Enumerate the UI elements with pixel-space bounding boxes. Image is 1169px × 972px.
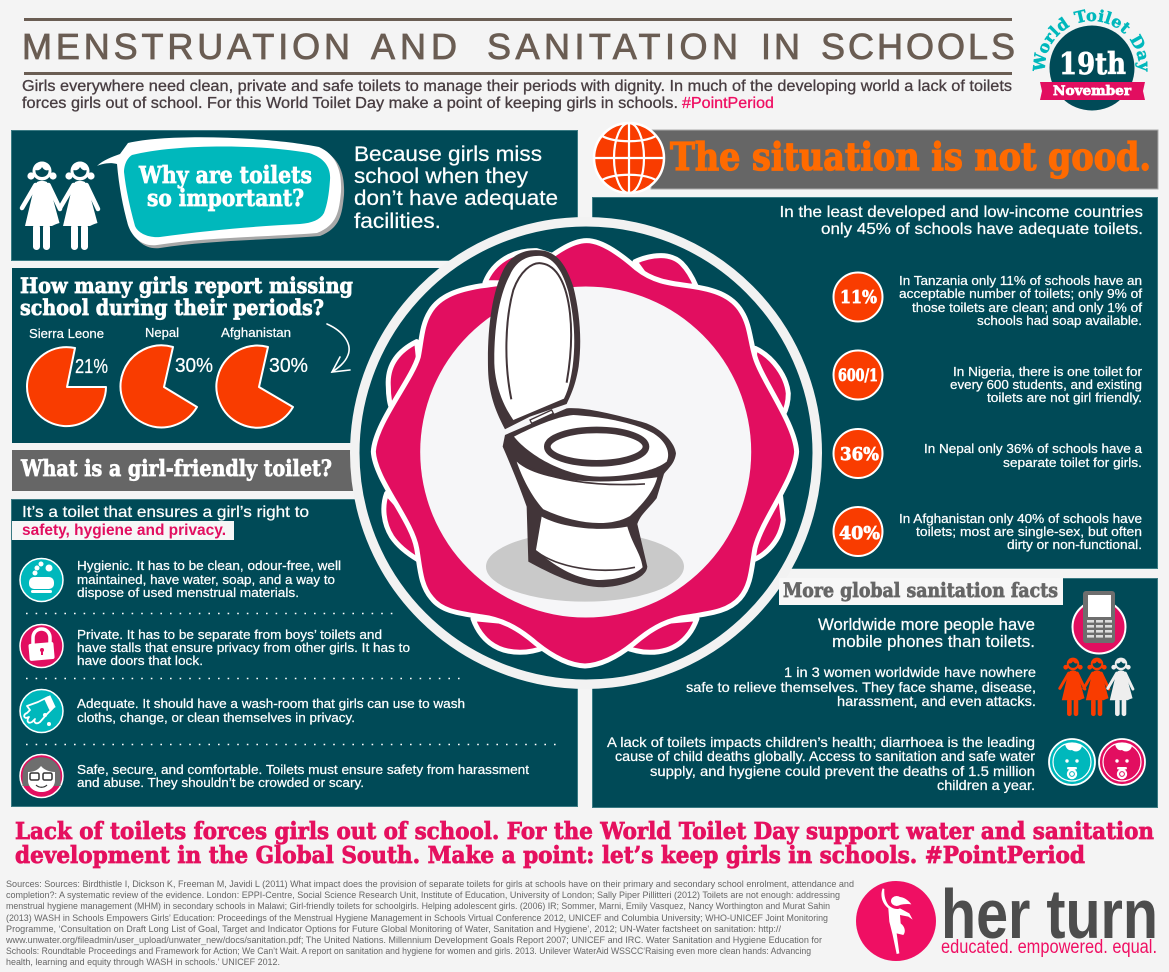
text: children's health: supply, and hygiene could prevent the deaths of 1.5 million — [650, 763, 1035, 779]
intro text: forces girls out of school. For this World Toilet Day make a point of keeping girls in schools. — [22, 95, 678, 112]
pie chart: Sierra Leone — [27, 326, 108, 426]
toilet illustration — [486, 250, 684, 602]
badge: World Toilet Day 19th November — [1032, 9, 1148, 110]
stat: Nigeria 600/1: 600/1 — [838, 366, 878, 386]
text: hygienic: Hygienic. It has to be clean, odour-free, well — [77, 558, 341, 573]
speech bubble: why are toilets so important — [97, 137, 344, 248]
stat: Afghanistan 40%: dirty or non-functional. — [1007, 538, 1142, 552]
text: children's health: cause of child deaths globally. Access to sanitation and safe water — [615, 748, 1035, 764]
text: 1 in 3 women: safe to relieve themselves. They face shame, disease, — [686, 679, 1036, 695]
stat: Tanzania 11% — [834, 272, 1143, 328]
stat: Afghanistan 40%: In Afghanistan only 40% of schools have — [899, 512, 1142, 526]
text: least developed countries: In the least developed and low-income countries — [780, 204, 1143, 221]
icon: mobile phone — [1072, 591, 1126, 654]
stat: Nigeria 600/1: every 600 students, and existing — [950, 378, 1142, 392]
text: children's health — [607, 734, 1035, 793]
text: because girls miss school — [354, 142, 558, 233]
stat: Nigeria 600/1 — [834, 350, 1142, 405]
text: definition of girl-friendly toilet — [12, 504, 309, 540]
title — [22, 18, 1015, 75]
panel: what is a girl-friendly toilet heading: What is a girl-friendly toilet? — [20, 456, 332, 482]
text: safe: and abuse. They shouldn’t be crowded or scary. — [77, 775, 364, 790]
text: mobile phones: Worldwide more people have — [818, 615, 1035, 634]
logo: her turn — [856, 875, 1158, 961]
panel: the situation heading bar — [651, 130, 1158, 189]
heading: more global sanitation facts: More global sanitation facts — [783, 579, 1058, 602]
sources: menstrual hygiene management (MHM) in secondary schools in Malawi; Girl-friendly toilets for schoolgirls. Helping adolescent girls. (2006) IR; Sommer, Marni, Emily Vasquez, Nancy Worthington and Murat Sahin — [6, 901, 830, 912]
stat: Afghanistan 40%: 40% — [839, 523, 880, 544]
text: definition of girl-friendly toilet: safety, hygiene and privacy. — [22, 522, 226, 539]
call to action — [15, 818, 1154, 869]
pie chart: Sierra Leone: Sierra Leone — [29, 326, 104, 341]
sources: Programme, ‘Consultation on Draft Long List of Goal, Target and Indicator Options for Future Global Monitoring of Water, Sanitation and Hygiene’, 2012; UN-Water factsheet on sanitation: http:// — [6, 924, 781, 935]
sources: Sources: Sources: Birdthistle I, Dickson K, Freeman M, Javidi L (2011) What impact does the provision of separate toilets for girls at schools have on their primary and secondary school enrolment, attendance and — [6, 879, 854, 890]
icon: globe — [594, 123, 664, 193]
pie chart: Afghanistan: Afghanistan — [221, 325, 291, 340]
flower badge — [373, 241, 797, 666]
text: adequate: Adequate. It should have a wash-room that girls can use to wash — [77, 696, 465, 711]
panel: more global facts — [592, 578, 1158, 808]
sources: (2013) WASH in Schools Empowers Girls’ Education: Proceedings of the Menstrual Hygiene Management in Schools Virtual Conference 2012, UNICEF and Columbia University; WHO-UNICEF Joint Monitoring — [6, 913, 828, 924]
text: mobile phones — [818, 615, 1035, 651]
stat: Nigeria 600/1: toilets are not girl friendly. — [987, 391, 1142, 405]
icon: two girls holding hands — [22, 162, 98, 250]
text: 1 in 3 women: 1 in 3 women worldwide have nowhere — [784, 664, 1036, 680]
icon: washing hand — [20, 690, 63, 732]
text: least developed countries: only 45% of schools have adequate toilets. — [821, 221, 1143, 238]
text: children's health: A lack of toilets impacts children’s health; diarrhoea is the leading — [607, 734, 1035, 750]
stat: Tanzania 11%: those toilets are clean; and only 1% of — [912, 301, 1143, 315]
text: because girls miss school: don’t have adequate — [354, 186, 558, 210]
icon: padlock — [20, 624, 63, 668]
sources: www.unwater.org/fileadmin/user_upload/unwater_new/docs/sanitation.pdf; The United Nations. Millennium Development Goals Report 2007; UNICEF and IRC. Water Sanitation and Hygiene Education for — [5, 935, 822, 946]
text: least developed countries — [780, 204, 1143, 238]
text: 1 in 3 women — [686, 664, 1036, 709]
arrow: curved hand drawn — [327, 324, 350, 372]
text: hygienic: maintained, have water, soap, and a way to — [77, 572, 335, 587]
sources: completion?: A systematic review of the evidence. London: EPPI-Centre, Social Science Research Unit, Institute of Education, University of London; Sally Piper Pillitteri (2012) Toilets are not enough: addressing — [6, 890, 840, 901]
badge: World Toilet Day 19th November: November — [1053, 84, 1131, 99]
icon: baby teal — [1049, 739, 1095, 785]
pie chart: Nepal: 30% — [175, 355, 213, 377]
stat: Tanzania 11%: acceptable number of toilets; only 9% of — [899, 287, 1143, 301]
stat: Afghanistan 40%: toilets; most are single-sex, but often — [916, 525, 1142, 539]
title: SANITATION — [487, 26, 738, 67]
title: MENSTRUATION — [22, 26, 350, 67]
pie chart: Sierra Leone: 21% — [75, 356, 108, 378]
pie chart: Afghanistan: 30% — [269, 355, 308, 377]
stat: Nepal 36%: separate toilet for girls. — [1003, 456, 1142, 470]
badge: World Toilet Day 19th November: 19th — [1059, 47, 1126, 82]
heading: how many girls report missing school — [20, 273, 353, 320]
text: because girls miss school: school when they — [354, 164, 528, 188]
title: SCHOOLS — [821, 26, 1015, 67]
text: 1 in 3 women: harassment, and even attacks. — [837, 693, 1036, 709]
text: adequate — [77, 696, 465, 725]
text: definition of girl-friendly toilet: It’s a toilet that ensures a girl’s right to — [22, 504, 309, 521]
title: IN — [761, 26, 800, 67]
text: private — [77, 627, 410, 668]
badge: World Toilet Day 19th November: World Toilet Day — [1032, 9, 1148, 72]
stat: Tanzania 11%: 11% — [840, 287, 877, 308]
text: because girls miss school: facilities. — [354, 209, 441, 233]
panel: what is a girl-friendly toilet heading — [12, 450, 362, 491]
intro text: #PointPeriod — [682, 95, 774, 112]
text: because girls miss school: Because girls miss — [354, 142, 542, 166]
text: private: have stalls that ensure privacy from other girls. It has to — [77, 640, 410, 655]
sources: health, learning and equity through WASH in schools.’ UNICEF 2012. — [6, 957, 280, 968]
stat: Nepal 36%: 36% — [840, 444, 879, 465]
icon: girl with glasses — [20, 754, 63, 798]
stat: Afghanistan 40% — [834, 507, 1142, 556]
intro text: Girls everywhere need clean, private and safe toilets to manage their periods with dignity. In much of the developing world a lack of toilets — [22, 78, 1012, 95]
stat: Nepal 36%: In Nepal only 36% of schools have a — [924, 442, 1142, 456]
pie chart: Nepal: Nepal — [145, 325, 179, 340]
stat: Tanzania 11%: schools had soap available. — [977, 314, 1142, 328]
text: adequate: cloths, change, or clean themselves in privacy. — [77, 710, 355, 725]
text: children's health: children a year. — [937, 777, 1035, 793]
panel: how many girls report — [12, 268, 502, 443]
text: safe — [77, 762, 529, 790]
icon: three girls — [1060, 658, 1133, 716]
pie chart: Nepal — [121, 325, 213, 427]
text: safe: Safe, secure, and comfortable. Toilets must ensure safety from harassment — [77, 762, 529, 777]
panel: situation — [592, 198, 1158, 568]
stat: Tanzania 11%: In Tanzania only 11% of schools have an — [899, 274, 1142, 288]
text: mobile phones: mobile phones than toilets. — [832, 632, 1035, 651]
stat: Nepal 36% — [834, 429, 1142, 478]
sources — [5, 879, 854, 968]
inner light circle — [420, 286, 751, 618]
icon: soap — [20, 558, 63, 602]
icon: baby pink — [1099, 739, 1145, 785]
text: private: Private. It has to be separate from boys’ toilets and — [77, 627, 382, 642]
stat: Nigeria 600/1: In Nigeria, there is one toilet for — [953, 365, 1142, 379]
call to action: development in the Global South. Make a point: let’s keep girls in schools. #PointPeriod — [15, 842, 1085, 869]
speech bubble: why are toilets so important: Why are toilets — [138, 162, 312, 189]
sources: Schools: Roundtable Proceedings and Framework for Action; We Can’t Wait. A report on sanitation and hygiene for women and girls. 2013. Unilever WaterAid WSSCC‘Raising even more clean hands: Advancing — [6, 946, 811, 957]
text: hygienic — [77, 558, 341, 600]
panel: why are toilets so important — [12, 130, 578, 260]
text: private: have doors that lock. — [77, 653, 203, 668]
pie chart: Afghanistan — [216, 325, 308, 428]
heading: how many girls report missing school: school during their periods? — [20, 295, 324, 320]
intro text — [22, 78, 1012, 112]
title: AND — [371, 26, 457, 67]
text: hygienic: dispose of used menstrual materials. — [77, 585, 299, 600]
central circle with toilet — [355, 222, 817, 684]
panel: girl-friendly toilet — [12, 500, 578, 806]
speech bubble: why are toilets so important: so important? — [147, 185, 304, 212]
heading: how many girls report missing school: How many girls report missing — [20, 273, 353, 298]
